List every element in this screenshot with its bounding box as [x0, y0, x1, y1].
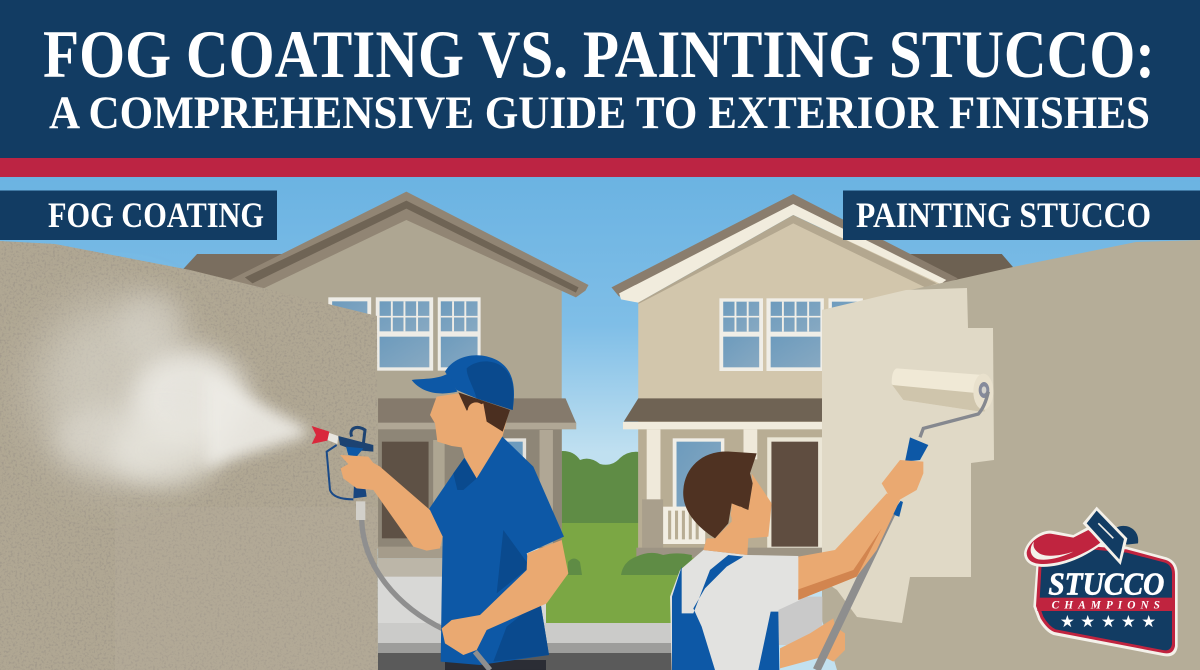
stars: ★ [1080, 612, 1095, 631]
stars: ★ [1101, 612, 1116, 631]
red band [1037, 598, 1175, 611]
tagline: CHAMPIONS [1052, 600, 1160, 612]
hand on gun [340, 455, 382, 490]
hose [362, 520, 445, 630]
pole [817, 513, 892, 670]
lower arm and hand [442, 540, 568, 655]
fresh paint patch [822, 288, 994, 623]
paint roller [892, 368, 993, 437]
wall shadow [115, 507, 378, 670]
porch [623, 398, 826, 558]
upper windows [719, 298, 863, 371]
centre landscape: bushes, lawn and sidewalk [378, 451, 698, 670]
stars [1060, 612, 1156, 631]
trowel [1083, 507, 1138, 565]
cap [412, 355, 514, 410]
back roof [898, 254, 1013, 287]
hose end [475, 652, 490, 670]
spray gun [312, 426, 373, 520]
painter [670, 437, 928, 670]
head [683, 452, 772, 555]
left stucco wall [0, 241, 378, 670]
trousers [445, 660, 546, 670]
overalls [672, 555, 779, 670]
house wall [253, 213, 562, 548]
logo: stucco champions [1024, 507, 1178, 656]
gable roof [611, 194, 958, 297]
fog spray cloud [35, 293, 306, 486]
raised arm and hand [798, 460, 923, 600]
header band [0, 0, 1200, 177]
right house [611, 194, 1013, 575]
porch [378, 398, 576, 577]
swoosh [1024, 527, 1105, 567]
forward arm [368, 460, 443, 551]
head [430, 392, 510, 478]
badge [1033, 538, 1178, 656]
stars: ★ [1060, 612, 1075, 631]
left house [182, 192, 589, 577]
label: painting stucco: PAINTING STUCCO [856, 195, 1151, 235]
stars: ★ [1121, 612, 1136, 631]
red stripe [0, 158, 1200, 177]
rear forearm and hand [780, 618, 845, 668]
gable roof [230, 192, 589, 297]
shirt [428, 436, 564, 665]
brand name: STUCCO [1048, 566, 1164, 602]
upper windows [328, 297, 481, 371]
title [43, 16, 1155, 139]
stars: ★ [1141, 612, 1156, 631]
shirt [670, 550, 800, 670]
label: fog coating [0, 190, 277, 240]
worker with sprayer [312, 355, 568, 670]
back roof [182, 254, 291, 290]
sky background [0, 177, 1200, 670]
pole, grip [778, 437, 928, 645]
shrub [621, 553, 692, 575]
label: fog coating: FOG COATING [48, 195, 264, 235]
right primed wall [822, 240, 1200, 670]
house wall [638, 217, 952, 548]
